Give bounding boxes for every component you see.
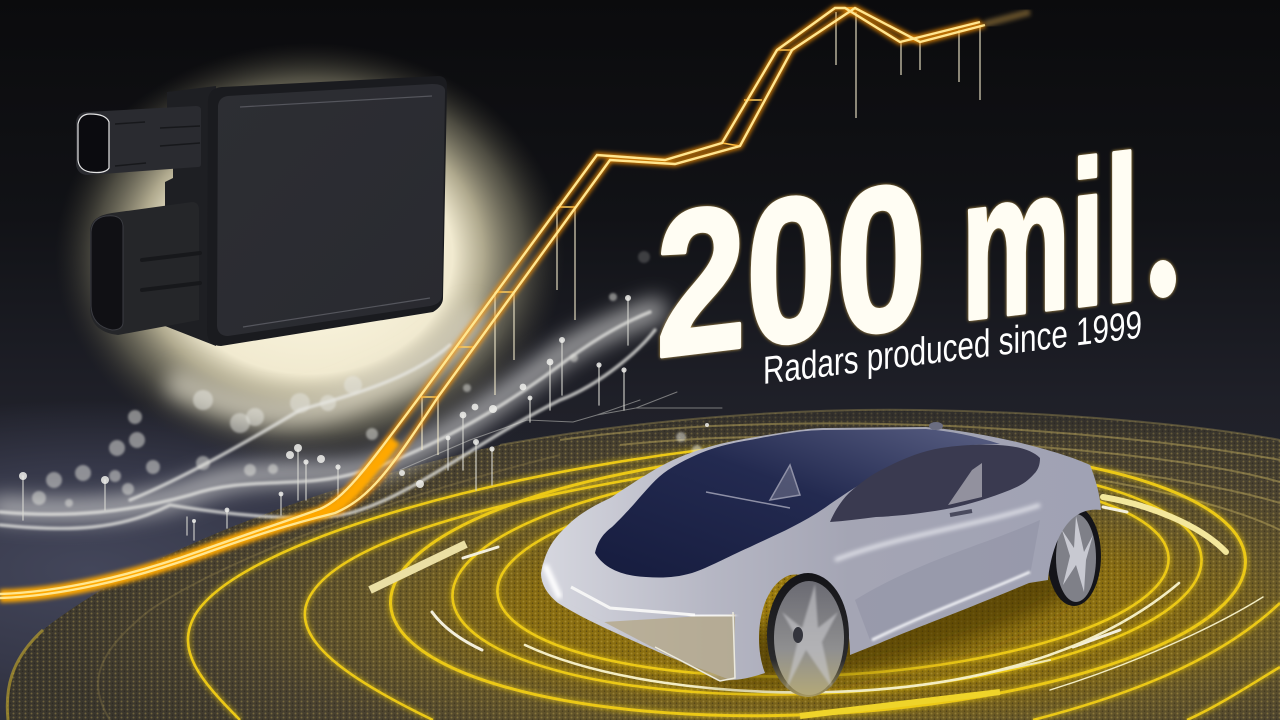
headline: 200 mil.	[656, 113, 1176, 401]
misty data wave	[0, 251, 722, 540]
mid smoke band	[0, 310, 655, 510]
full stop dot	[1150, 260, 1176, 298]
roof sensor	[929, 422, 943, 430]
seat in window	[948, 463, 982, 505]
radar floor with concentric rings	[7, 404, 1280, 720]
radar plate face	[217, 84, 445, 336]
upper rail glow	[321, 8, 980, 509]
wave strands	[0, 312, 655, 528]
full stop character: .	[1151, 204, 1176, 308]
dotted floor surface	[7, 410, 1280, 720]
car underglow shadow	[696, 542, 1084, 708]
front wheel	[767, 573, 849, 697]
front fascia and grille	[545, 565, 735, 681]
faint outer rings	[98, 410, 1280, 720]
side window	[830, 445, 1040, 522]
mesh strands	[400, 392, 722, 470]
outer left ring edge	[7, 630, 43, 720]
upper rail	[0, 8, 980, 594]
door handle	[950, 511, 972, 515]
growth line chart	[0, 8, 1030, 598]
car body	[541, 427, 1101, 680]
sharp data dots	[19, 295, 709, 523]
upper connector	[76, 106, 201, 175]
fading tail	[985, 12, 1030, 24]
bright yellow radar rings	[188, 428, 1280, 720]
vertical drop lines	[422, 12, 980, 455]
floor fade at horizon	[500, 404, 1280, 444]
upper smoke band	[180, 320, 470, 412]
lower side shading	[855, 520, 1040, 640]
lower rail	[0, 8, 985, 598]
radar sensor unit	[76, 76, 447, 346]
number 200: 200	[656, 139, 926, 401]
glass roof and windshield	[595, 429, 1000, 578]
unit mil: mil	[961, 113, 1139, 364]
radar halo glow	[55, 43, 565, 467]
blurred data dots	[32, 251, 702, 507]
lighter left side of background	[0, 400, 490, 720]
radar rear housing	[165, 86, 216, 346]
silver concept car	[541, 422, 1101, 708]
lower rail glow	[335, 8, 985, 513]
shoulder highlight	[835, 505, 1040, 560]
bright ring dashes	[370, 497, 1263, 716]
rear wheel	[1047, 506, 1101, 606]
body highlight	[872, 572, 1030, 640]
ladder rungs	[421, 8, 855, 397]
floor dot texture	[7, 410, 1280, 720]
subtitle: Radars produced since 1999	[763, 304, 1142, 393]
data ticks	[23, 298, 628, 540]
lower connector	[90, 202, 200, 335]
radar front plate	[207, 76, 447, 346]
windshield interior	[706, 465, 800, 508]
thick lower segment glow	[0, 440, 395, 596]
